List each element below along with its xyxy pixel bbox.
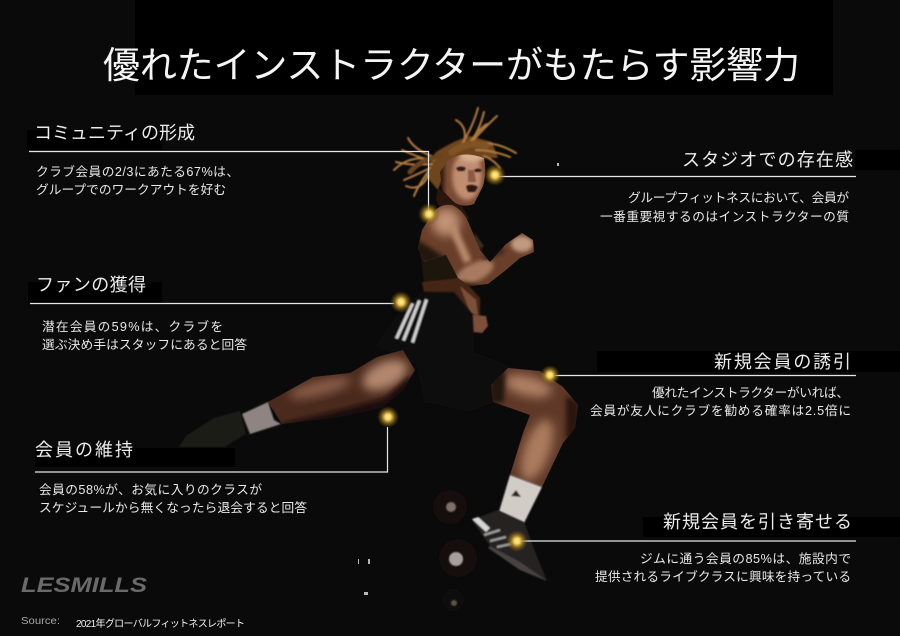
leader line: retention [35,427,388,472]
block: community: グループでのワークアウトを好む [36,183,226,197]
weight plates [433,490,477,611]
block: studio presence: 一番重要視するのはインストラクターの質 [600,209,849,224]
block: community: クラブ会員の2/3にあたる67%は、 [36,164,239,179]
logo: Les Mills: LESMILLS [21,574,147,597]
block: fan acquisition: ファンの獲得 [36,275,146,295]
leader line: fans [30,302,394,304]
block: retention: 会員の維持 [35,440,133,460]
title: 優れたインストラクターがもたらす影響力 [103,45,800,86]
heading panels [27,130,900,537]
rear shoe [179,411,246,447]
block: new member referral: 会員が友人にクラブを勧める確率は2.5倍に [590,403,851,418]
block: retention: スケジュールから無くなったら退会すると回答 [39,500,307,515]
leader line: attracting [522,540,856,542]
block: community [29,123,428,214]
front leg [491,368,578,487]
front shoe [472,510,547,581]
source label: Source: [21,615,60,627]
block: studio presence: グループフィットネスにおいて、会員が [628,191,849,205]
glowing markers [377,164,560,552]
source text: 2021年グローバルフィットネスレポート [76,617,245,630]
block: retention [35,427,388,515]
block: fan acquisition: 潜在会員の59%は、クラブを [42,319,223,334]
block: fan acquisition [30,275,394,352]
block: new member referral: 新規会員の誘引 [714,352,851,372]
block: new member referral [555,352,856,418]
leader line: studio presence [497,176,856,178]
block: attracting members: 新規会員を引き寄せる [663,512,852,532]
front sock [498,475,542,523]
arm and shoulder [418,204,534,286]
leader line: community [29,152,428,214]
leader line: referral [555,374,856,376]
block: retention: 会員の58%が、お気に入りのクラスが [39,482,262,497]
hair [394,108,516,196]
block: fan acquisition: 選ぶ決め手はスタッフにあると回答 [42,337,247,352]
title panel [135,0,833,95]
neck [436,188,470,220]
block: community: コミュニティの形成 [34,123,195,143]
head [440,154,486,206]
block: studio presence [497,150,856,224]
rear sock [242,402,281,434]
shorts [375,292,510,412]
athlete photo [179,108,585,611]
torso and top [420,232,484,318]
block: attracting members: 提供されるライブクラスに興味を持っている [595,569,851,584]
background specks [358,163,559,595]
rear leg [268,350,415,424]
block: studio presence: スタジオでの存在感 [682,150,853,170]
block: attracting members: ジムに通う会員の85%は、施設内で [640,552,851,566]
block: new member referral: 優れたインストラクターがいれば、 [652,386,849,400]
block: attracting members [522,512,856,584]
